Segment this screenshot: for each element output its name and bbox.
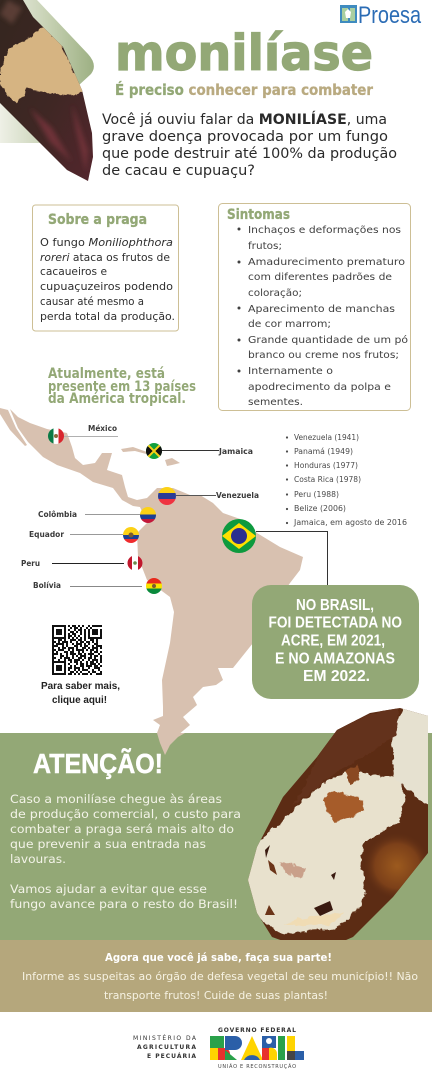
country labels: Colômbia bbox=[38, 509, 77, 519]
country labels: Venezuela bbox=[216, 491, 259, 500]
flag: Equador bbox=[123, 527, 139, 543]
Caribbean islands bbox=[121, 447, 180, 466]
heading: presença na América tropical: Atualmente, está bbox=[48, 366, 165, 382]
flag: Bolívia bbox=[146, 578, 162, 594]
symptom list: apodrecimento da polpa e bbox=[248, 382, 391, 393]
text block: atenção: combater a praga será mais alto do bbox=[10, 822, 234, 836]
country labels: Peru bbox=[21, 559, 40, 568]
panel: sintomas bbox=[218, 204, 410, 410]
connector lines bbox=[52, 436, 328, 586]
heading: presença na América tropical bbox=[48, 366, 196, 407]
symptom list: Aparecimento de manchas bbox=[248, 304, 395, 315]
text block: atenção: Vamos ajudar a evitar que esse bbox=[10, 882, 207, 896]
symptom list: Inchaços e deformações nos bbox=[248, 225, 401, 236]
list of countries and years: Peru (1988) bbox=[294, 490, 339, 499]
text block: sobre a praga: causar até mesmo a bbox=[40, 296, 144, 308]
logo: Proesa: Proesa bbox=[358, 2, 422, 29]
symptom list: sementes. bbox=[248, 397, 303, 408]
panel: faça sua parte: transporte frutos! Cuide de suas plantas! bbox=[104, 989, 328, 1002]
flag: Brasil bbox=[222, 519, 256, 553]
symptom list bbox=[238, 225, 408, 408]
text block: sobre a praga: O fungo Moniliophthora bbox=[40, 237, 173, 249]
heading: atenção: ATENÇÃO! bbox=[33, 748, 163, 779]
symptom list: Internamente o bbox=[248, 366, 333, 377]
QR code bbox=[52, 626, 102, 674]
country labels bbox=[21, 423, 259, 590]
QR caption: clique aqui! bbox=[52, 695, 107, 706]
symptom list: com diferentes padrões de bbox=[248, 272, 392, 283]
panel: faça sua parte bbox=[0, 940, 432, 1012]
list of countries and years: Costa Rica (1978) bbox=[294, 475, 361, 484]
panel: sobre a praga bbox=[32, 205, 178, 331]
symptom list: coloração; bbox=[248, 288, 302, 299]
heading: presença na América tropical: da América tropical. bbox=[48, 391, 186, 407]
symptom list: Amadurecimento prematuro bbox=[248, 257, 405, 268]
list of countries and years: Venezuela (1941) bbox=[294, 433, 359, 442]
icon: infected fruit bbox=[244, 705, 432, 950]
logo: Governo Federal Brasil: UNIÃO E RECONSTRUÇÃO bbox=[218, 1063, 296, 1070]
text block: atenção: lavouras. bbox=[10, 852, 66, 866]
icon: cacao pod bbox=[0, 0, 95, 182]
panel: atenção bbox=[0, 733, 432, 940]
flag: Colômbia bbox=[140, 507, 156, 523]
callout: Brasil: FOI DETECTADA NO bbox=[268, 614, 402, 632]
country labels: Equador bbox=[29, 530, 64, 539]
logo: Proesa bbox=[340, 2, 422, 29]
text block: sobre a praga: perda total da produção. bbox=[40, 311, 175, 323]
text block: atenção: que prevenir a sua entrada nas bbox=[10, 837, 206, 851]
map tip over band bbox=[157, 733, 185, 755]
heading: sintomas: Sintomas bbox=[227, 207, 290, 223]
heading: sobre a praga: Sobre a praga bbox=[48, 212, 147, 228]
text block: sobre a praga: cupuaçuzeiros podendo bbox=[40, 281, 173, 293]
intro text bbox=[102, 111, 397, 179]
text block: atenção: Caso a monilíase chegue às áreas bbox=[10, 792, 222, 806]
logo: Ministério da Agricultura e Pecuária: MINISTÉRIO DA bbox=[133, 1034, 197, 1042]
text block: sobre a praga: cacaueiros e bbox=[40, 266, 107, 278]
panel: faça sua parte: Informe as suspeitas ao órgão de defesa vegetal de seu município!! Não bbox=[22, 970, 418, 983]
panel: faça sua parte: Agora que você já sabe, faça sua parte! bbox=[105, 951, 332, 964]
country labels: Jamaica bbox=[218, 447, 253, 456]
heading: presença na América tropical: presente em 13 países bbox=[48, 379, 196, 395]
flag: Venezuela bbox=[158, 487, 176, 505]
intro text: de cacau e cupuaçu? bbox=[102, 163, 255, 179]
country labels: México bbox=[88, 423, 117, 433]
QR caption: Para saber mais, bbox=[41, 681, 120, 692]
callout: Brasil bbox=[252, 585, 419, 699]
logo: Governo Federal Brasil bbox=[210, 1027, 304, 1070]
flag: Peru bbox=[128, 556, 142, 570]
symptom list: frutos; bbox=[248, 241, 282, 252]
callout: Brasil: EM 2022. bbox=[303, 668, 370, 685]
text block: sobre a praga: roreri ataca os frutos de bbox=[40, 252, 170, 264]
QR caption bbox=[41, 681, 120, 706]
text block: atenção: de produção comercial, o custo para bbox=[10, 807, 241, 821]
symptom list: de cor marrom; bbox=[248, 319, 331, 330]
map: Americas bbox=[0, 408, 303, 755]
symptom list: Grande quantidade de um pó bbox=[248, 334, 408, 346]
list of countries and years: Belize (2006) bbox=[294, 504, 346, 513]
list of countries and years: Jamaica, em agosto de 2016 bbox=[293, 518, 407, 527]
title: monilíase bbox=[115, 25, 373, 82]
logo: Ministério da Agricultura e Pecuária bbox=[133, 1034, 197, 1060]
callout: Brasil: ACRE, EM 2021, bbox=[281, 632, 385, 650]
country labels: Bolívia bbox=[33, 581, 61, 590]
logo: Governo Federal Brasil: GOVERNO FEDERAL bbox=[218, 1027, 296, 1034]
flag: Jamaica bbox=[146, 443, 162, 459]
callout: Brasil: E NO AMAZONAS bbox=[275, 650, 395, 668]
text block: atenção: fungo avance para o resto do Brasil! bbox=[10, 897, 238, 911]
logo: Ministério da Agricultura e Pecuária: AGRICULTURA bbox=[137, 1044, 196, 1051]
intro text: Você já ouviu falar da MONILÍASE, uma bbox=[102, 111, 387, 128]
logo: Ministério da Agricultura e Pecuária: E PECUÁRIA bbox=[147, 1053, 196, 1060]
intro text: que pode destruir até 100% da produção bbox=[102, 146, 397, 162]
header green shape bbox=[0, 0, 94, 143]
list of countries and years: Honduras (1977) bbox=[294, 461, 358, 470]
list of countries and years bbox=[286, 433, 407, 527]
symptom list: branco ou creme nos frutos; bbox=[248, 350, 399, 361]
list of countries and years: Panamá (1949) bbox=[294, 447, 353, 456]
callout: Brasil: NO BRASIL, bbox=[296, 597, 374, 614]
subtitle: É preciso conhecer para combater bbox=[115, 80, 374, 99]
text block: sobre a praga bbox=[40, 237, 175, 323]
flag: México bbox=[48, 428, 64, 444]
intro text: grave doença provocada por um fungo bbox=[102, 129, 388, 145]
text block: atenção bbox=[10, 792, 241, 911]
